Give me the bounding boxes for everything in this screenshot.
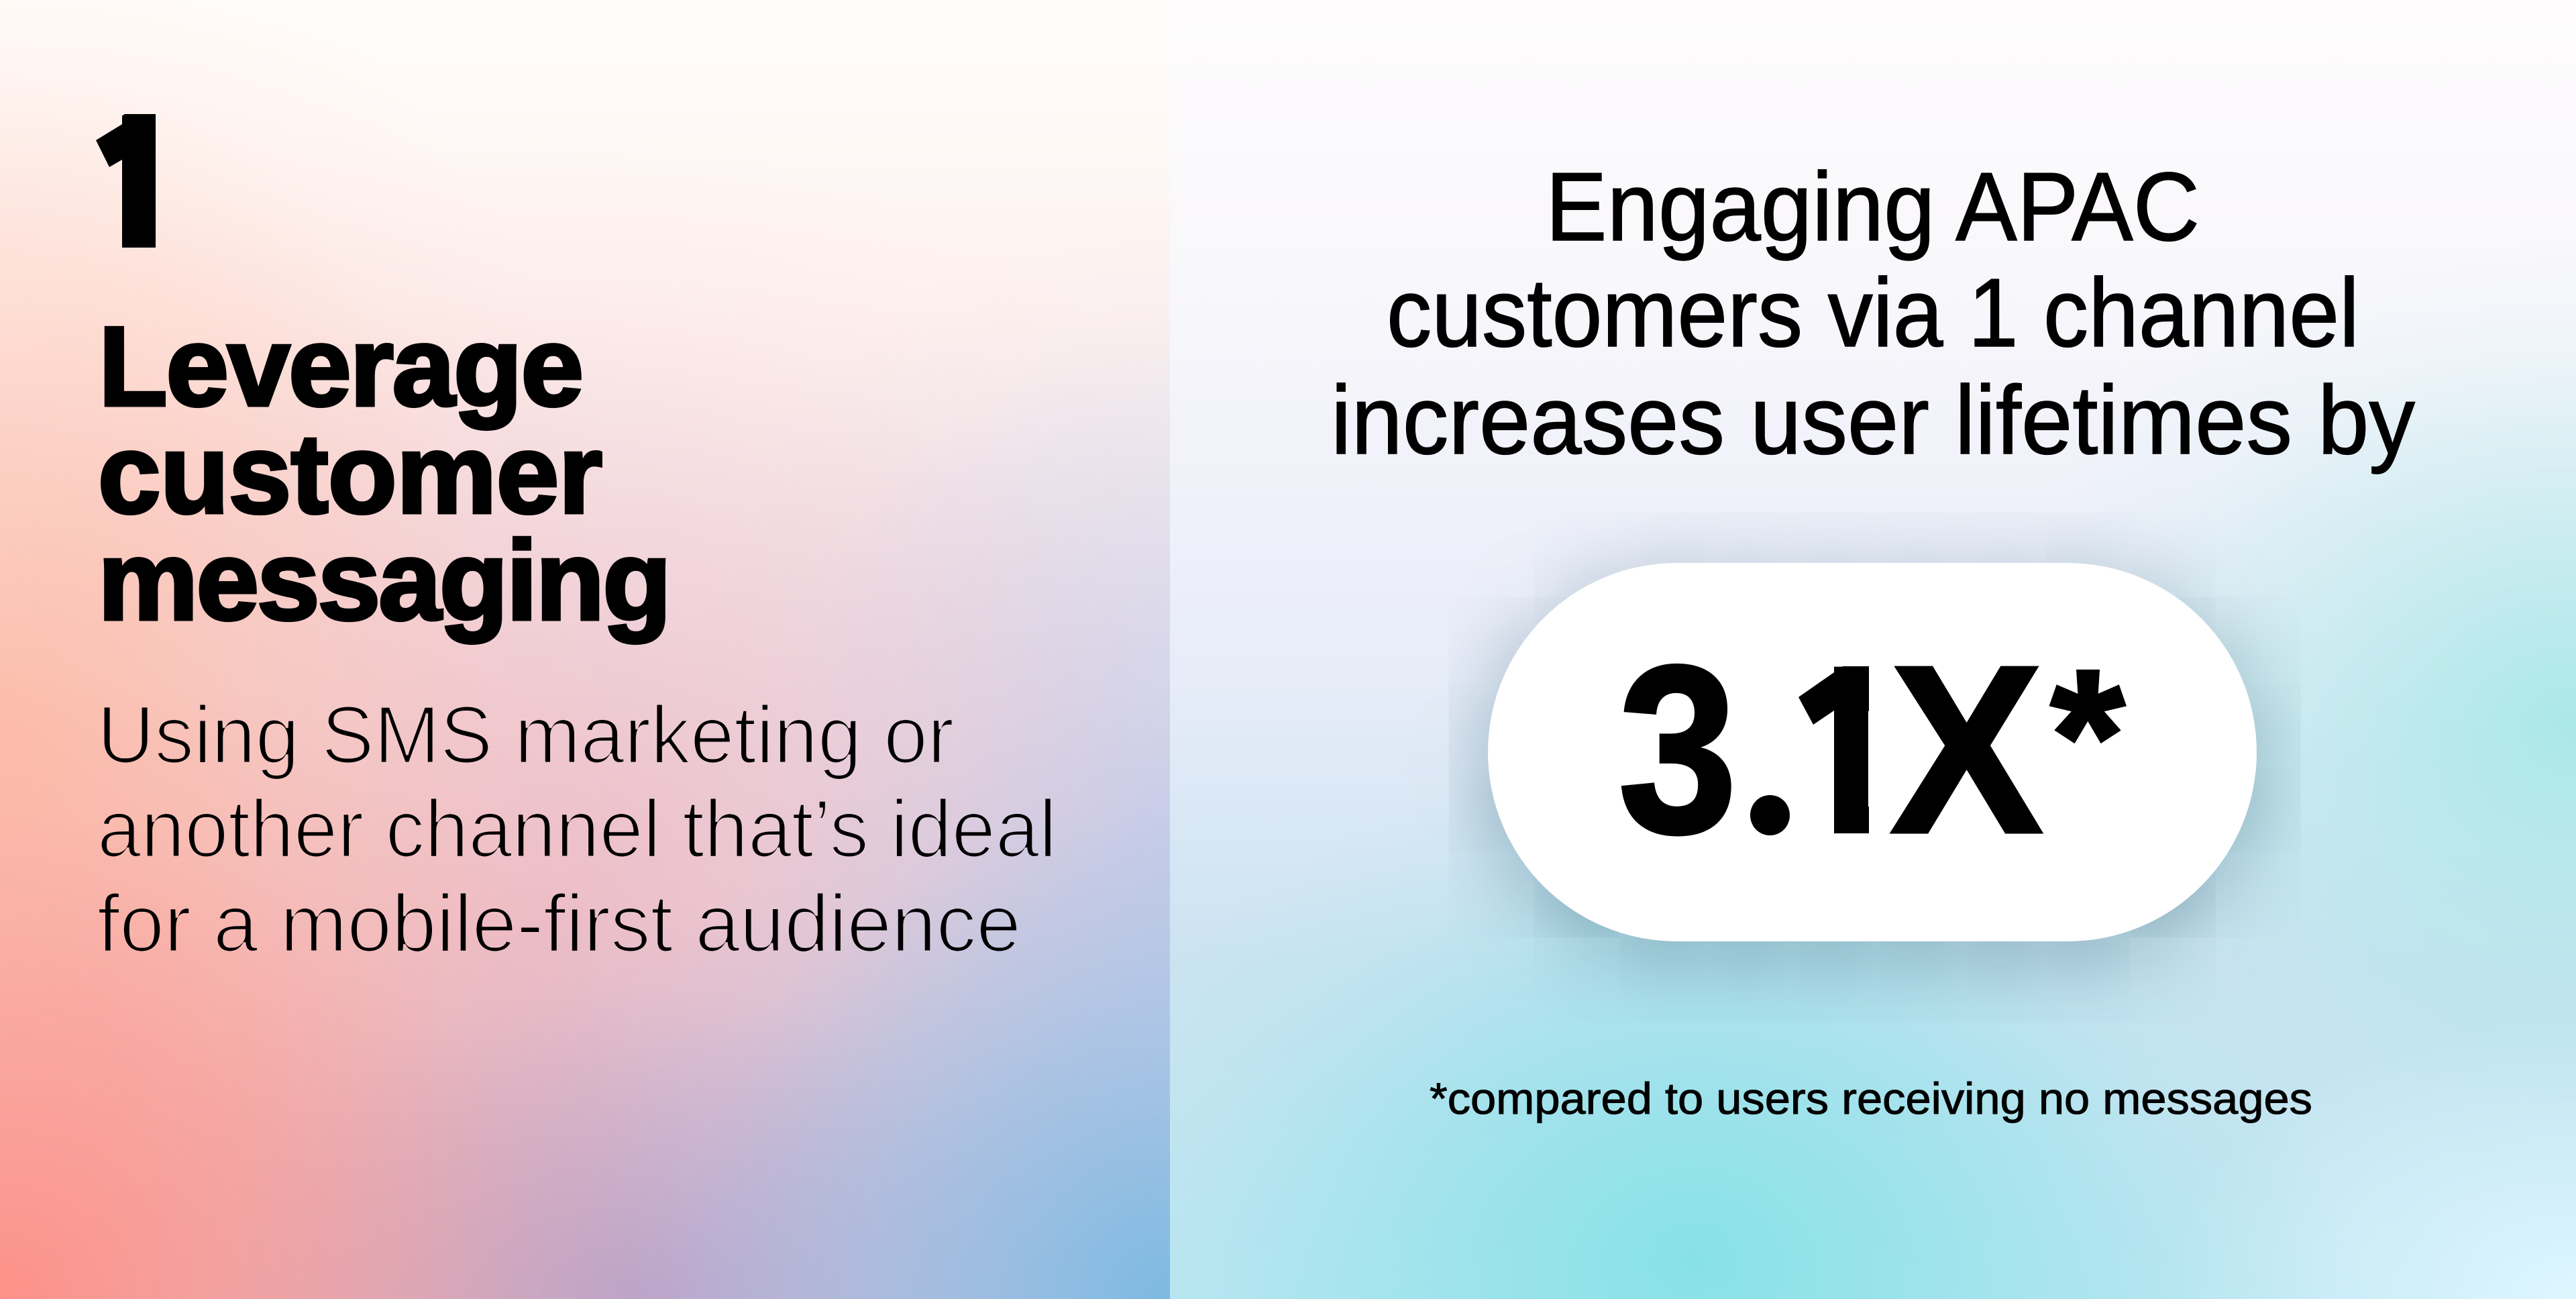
- body text: [97, 689, 1057, 969]
- stat headline: increases user lifetimes by: [1331, 366, 2415, 474]
- body text: for a mobile-first audience: [97, 878, 1021, 969]
- stat headline: customers via 1 channel: [1387, 258, 2359, 367]
- stat headline: Engaging APAC: [1546, 152, 2200, 261]
- stat value: 3: [1618, 617, 1737, 883]
- panel: left recommendation: [0, 0, 1170, 1299]
- heading: [98, 303, 672, 643]
- footnote: *compared to users receiving no messages: [1430, 1074, 2312, 1123]
- stat headline: [1331, 152, 2415, 474]
- heading: messaging: [98, 517, 672, 643]
- stat value: *: [2051, 631, 2125, 841]
- stat value: .: [1737, 617, 1803, 883]
- body text: another channel that’s ideal: [97, 783, 1057, 874]
- step number: [96, 114, 156, 248]
- step number: 1: [82, 79, 186, 288]
- heading: Leverage: [99, 303, 584, 429]
- body text: Using SMS marketing or: [97, 689, 954, 780]
- stat value: [1621, 663, 2127, 836]
- panel: right statistic: [1170, 169, 2576, 1299]
- heading: customer: [98, 411, 602, 537]
- stat value: 1: [1778, 618, 1911, 884]
- stat value: X: [1890, 617, 2044, 883]
- stat pill background: [1488, 563, 2257, 941]
